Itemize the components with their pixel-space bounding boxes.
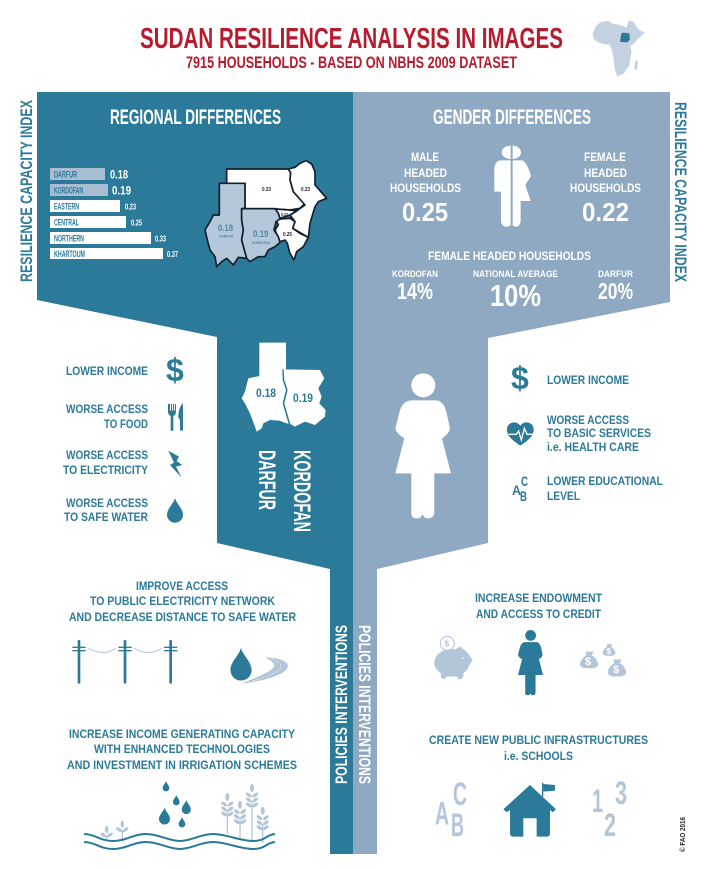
female headed households block: DARFUR: [598, 269, 633, 280]
text: increase endowment: [475, 591, 603, 621]
icon: ABC letters: [512, 473, 528, 504]
text: improve access: [69, 579, 296, 624]
label: Darfur: DARFUR: [253, 450, 280, 510]
map: Sudan regions: 0.25: [283, 232, 292, 238]
icon: split male and female figure: [494, 146, 531, 227]
icon: dollar: $: [166, 352, 184, 388]
icon: water drop: [230, 648, 252, 681]
right list: gender deprivations: i.e. HEALTH CARE: [547, 440, 639, 454]
bar chart: resilience by region: KORDOFAN: [54, 186, 83, 196]
bar chart: resilience by region: 0.33: [155, 234, 166, 244]
left list: regional deprivations: TO FOOD: [104, 417, 148, 431]
map: Darfur and Kordofan: 0.19: [293, 393, 313, 405]
female headed households block: KORDOFAN: [392, 269, 438, 280]
male headed households stat: MALE: [411, 150, 439, 164]
icon: ABC letters: C: [521, 473, 528, 489]
map: Sudan regions: 0.33: [262, 187, 271, 193]
right list: gender deprivations: LEVEL: [547, 489, 580, 503]
right list: gender deprivations: WORSE ACCESS: [547, 413, 629, 427]
bar chart: resilience by region: NORTHERN: [54, 234, 84, 244]
bar chart: resilience by region: [50, 168, 178, 259]
right axis label: RESILIENCE CAPACITY INDEX: [671, 102, 690, 282]
female headed households block: 10%: [490, 278, 541, 313]
icon: large ABC letters: [435, 776, 467, 843]
bar chart: resilience by region: KHARTOUM: [54, 249, 85, 259]
male headed households stat: HEADED: [404, 166, 447, 180]
text: improve access: TO PUBLIC ELECTRICITY NETWORK: [90, 594, 275, 608]
icon: water waves: [84, 834, 275, 849]
female headed households block: 14%: [397, 278, 433, 304]
panel: gender differences funnel: [353, 92, 670, 854]
map: Sudan regions: [205, 161, 327, 267]
right list: gender deprivations: LOWER INCOME: [547, 373, 629, 387]
icon: large ABC letters: B: [451, 807, 464, 843]
icon: road: [242, 657, 288, 684]
icon: large 123 numbers: 3: [615, 775, 627, 811]
map: Sudan regions: 0.23: [301, 187, 310, 193]
icon: wheat and sprouts: [100, 784, 270, 843]
text: increase income: [67, 727, 297, 772]
male headed households stat: 0.25: [402, 197, 448, 227]
icon: large ABC letters: C: [453, 776, 467, 812]
icon: fork and knife: [168, 403, 183, 431]
right list: gender deprivations: TO BASIC SERVICES: [547, 426, 651, 440]
female headed households stat: 0.22: [582, 197, 629, 227]
icon: lightning bolt: [168, 451, 182, 478]
subtitle: 7915 HOUSEHOLDS - BASED ON NBHS 2009 DATASET: [186, 53, 517, 72]
left axis label: RESILIENCE CAPACITY INDEX: [17, 100, 36, 282]
bar chart: resilience by region: 0.23: [125, 202, 136, 212]
icon: money bags: [580, 644, 626, 676]
bar chart: resilience by region: 0.37: [167, 249, 178, 259]
icon: ABC letters: B: [520, 488, 527, 504]
panel: regional differences funnel: [37, 92, 353, 854]
text: improve access: AND DECREASE DISTANCE TO SAFE WATER: [69, 610, 296, 624]
map: Darfur and Kordofan: [242, 343, 326, 432]
map: Sudan regions: DARFUR: [219, 234, 233, 238]
left list: regional deprivations: WORSE ACCESS: [66, 402, 148, 416]
icon: money bags: $: [606, 647, 612, 656]
bar chart: resilience by region: 0.25: [131, 218, 142, 228]
left list: regional deprivations: WORSE ACCESS: [66, 448, 148, 462]
text: increase income: AND INVESTMENT IN IRRIGATION SCHEMES: [67, 758, 297, 772]
heading: gender differences: GENDER DIFFERENCES: [433, 106, 591, 129]
text: increase endowment: AND ACCESS TO CREDIT: [476, 607, 602, 621]
icon: piggy bank: $: [445, 640, 450, 649]
female headed households block: 20%: [598, 278, 633, 304]
bar chart: resilience by region: 0.19: [112, 184, 131, 198]
text: create new public infrastructures: [429, 733, 648, 763]
icon: ABC letters: A: [512, 482, 521, 498]
left list: regional deprivations: WORSE ACCESS: [66, 496, 148, 510]
icon: large 123 numbers: 2: [604, 807, 616, 843]
label: Kordofan: KORDOFAN: [288, 450, 315, 532]
left list: regional deprivations: TO SAFE WATER: [64, 510, 148, 524]
heading: regional differences: REGIONAL DIFFERENCES: [110, 106, 281, 129]
icon: water drops: [159, 781, 191, 827]
female headed households stat: FEMALE: [584, 150, 626, 164]
map: Sudan regions: KORDOFAN: [252, 240, 270, 245]
text: increase endowment: INCREASE ENDOWMENT: [475, 591, 603, 605]
icon: woman: [395, 373, 451, 518]
bar chart: resilience by region: CENTRAL: [54, 218, 79, 228]
credit: © FAO 2016: [679, 817, 687, 852]
bar chart: resilience by region: 0.18: [110, 168, 128, 182]
left list: regional deprivations: TO ELECTRICITY: [63, 463, 148, 477]
text: create new public infrastructures: CREATE NEW PUBLIC INFRASTRUCTURES: [429, 733, 648, 747]
map: Sudan regions: 0.37: [281, 212, 288, 217]
left list: regional deprivations: [63, 364, 148, 524]
icon: dollar: $: [511, 360, 529, 396]
icon: Africa map with Sudan highlighted: [593, 21, 645, 77]
icon: heart with pulse: [507, 422, 534, 446]
icon: woman: [518, 630, 543, 695]
right list: gender deprivations: LOWER EDUCATIONAL: [547, 474, 663, 488]
icon: large 123 numbers: [592, 775, 627, 843]
icon: electricity poles: [72, 640, 177, 684]
female headed households block: [392, 249, 633, 313]
female headed households stat: HEADED: [584, 166, 627, 180]
icon: school house with flag: [503, 783, 556, 837]
bar chart: resilience by region: EASTERN: [54, 202, 79, 212]
female headed households stat: HOUSEHOLDS: [570, 181, 641, 195]
text: create new public infrastructures: i.e. SCHOOLS: [504, 749, 573, 763]
left list: regional deprivations: LOWER INCOME: [66, 364, 148, 378]
column label: policies interventions (left): POLICIES INTERVENTIONS: [332, 625, 351, 784]
icon: large 123 numbers: 1: [592, 783, 603, 819]
icon: large ABC letters: A: [435, 795, 449, 831]
text: increase income: INCREASE INCOME GENERATING CAPACITY: [69, 727, 295, 741]
male headed households stat: HOUSEHOLDS: [390, 181, 461, 195]
map: Sudan regions: 0.19: [253, 229, 268, 239]
icon: piggy bank: [434, 636, 473, 679]
column label: policies interventions (right): POLICIES INTERVENTIONS: [355, 625, 374, 784]
icon: water drop: [167, 498, 183, 523]
female headed households block: FEMALE HEADED HOUSEHOLDS: [428, 249, 591, 263]
text: increase income: WITH ENHANCED TECHNOLOGIES: [94, 742, 270, 756]
icon: money bags: $: [585, 656, 591, 668]
map: Darfur and Kordofan: 0.18: [256, 388, 277, 400]
right list: gender deprivations: [547, 373, 663, 503]
female headed households block: NATIONAL AVERAGE: [473, 269, 558, 280]
map: Sudan regions: 0.18: [218, 223, 233, 233]
male headed households stat: [390, 150, 461, 227]
bar chart: resilience by region: DARFUR: [54, 170, 77, 180]
female headed households stat: [570, 150, 641, 227]
icon: money bags: $: [613, 664, 619, 676]
text: improve access: IMPROVE ACCESS: [136, 579, 228, 593]
